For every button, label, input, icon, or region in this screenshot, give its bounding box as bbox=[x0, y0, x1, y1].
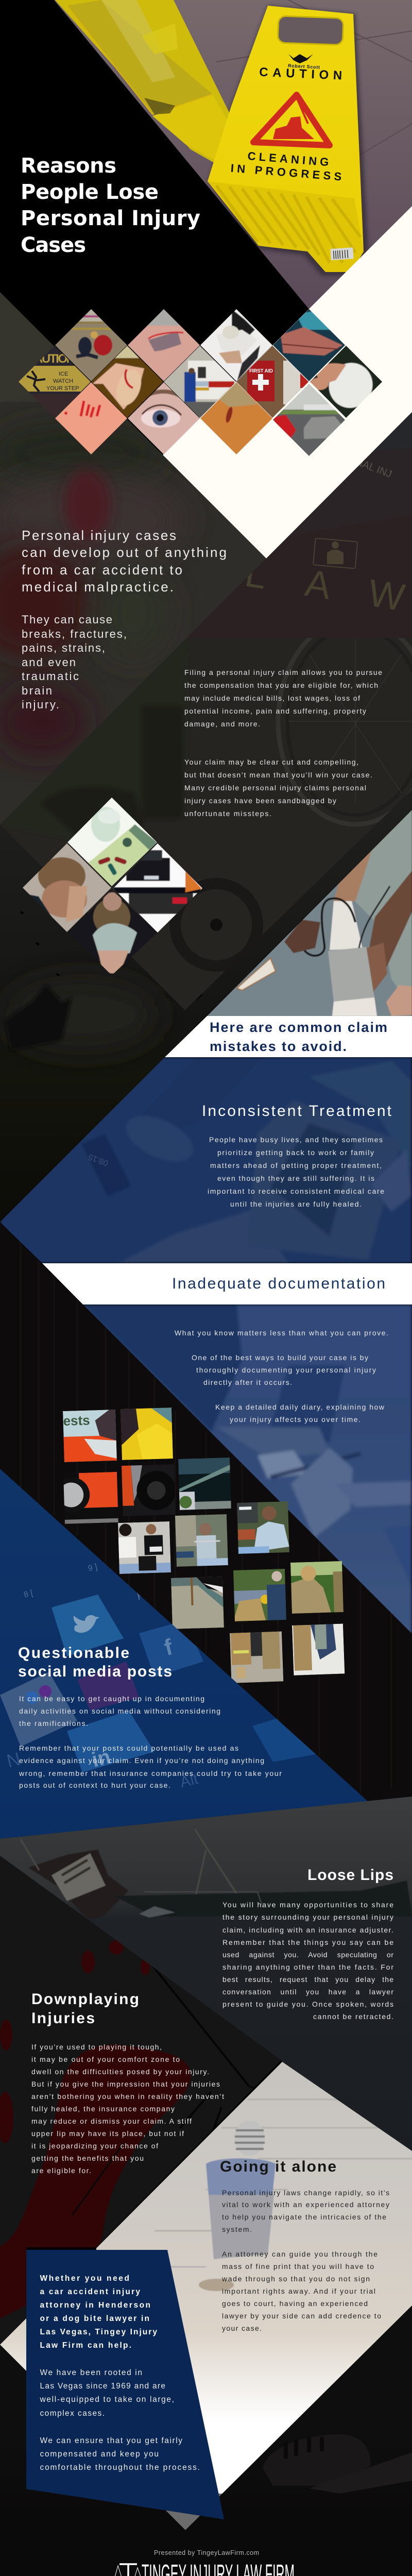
text block: filing a claim: Your claim may be clear cut and compelling, bbox=[184, 758, 358, 766]
panel: questionable social media posts: Remember that your posts could potentially be used as bbox=[19, 1744, 238, 1752]
right standing sign: IN PROGRESS bbox=[230, 162, 342, 183]
photo tile: firefighter at car bbox=[233, 1569, 286, 1621]
intro text: personal injury cases: brain bbox=[22, 684, 52, 697]
panel: going it alone with stone wall photo: mass of fine print that you will have to bbox=[222, 2262, 374, 2270]
photo tile: orange car with sign bbox=[63, 1410, 117, 1462]
panel: callout common claim mistakes: Here are common claim bbox=[210, 1020, 387, 1035]
photo tile: firefighter legs bbox=[230, 1631, 283, 1683]
diamond: gash on orange skin bbox=[198, 381, 276, 456]
callout: tingey injury law firm can help bbox=[26, 2247, 224, 2519]
panel: loose lips with shipwreck photo: conversation until you have a lawyer bbox=[222, 1988, 393, 1996]
right standing sign: CLEANING bbox=[247, 149, 329, 168]
panel: downplaying injuries: fully healed, the insurance company bbox=[31, 2105, 175, 2113]
panel: going it alone with stone wall photo: An attorney can guide you through the bbox=[222, 2250, 377, 2258]
panel: going it alone with stone wall photo: vital to work with an experienced attorney bbox=[222, 2200, 389, 2209]
panel: inadequate documentation photo: What you know matters less than what you can prove. bbox=[175, 1329, 388, 1337]
panel: going it alone with stone wall photo bbox=[0, 2061, 412, 2532]
intro text: personal injury cases: breaks, fractures, bbox=[22, 628, 127, 640]
photo tile: orange fender and wheel bbox=[54, 1472, 118, 1524]
panel: cream chevron band bbox=[163, 206, 412, 558]
diamond: cut finger bbox=[90, 343, 165, 420]
panel: questionable social media posts: P bbox=[135, 1588, 147, 1603]
panel: downplaying injuries bbox=[0, 1855, 288, 2349]
callout: tingey injury law firm can help: Law Firm can help. bbox=[40, 2341, 131, 2350]
panel: inadequate documentation photo bbox=[82, 1304, 412, 1634]
intro text: personal injury cases: They can cause bbox=[22, 613, 112, 626]
panel: inadequate documentation photo: Keep a detailed daily diary, explaining how bbox=[215, 1403, 385, 1411]
diamond: first aid sign bbox=[236, 346, 308, 418]
callout: tingey injury law firm can help: or a dog bite lawyer in bbox=[40, 2314, 149, 2323]
photo tile: orange car with sign: ests bbox=[63, 1412, 90, 1429]
diamond: distressed man bbox=[21, 842, 113, 935]
right standing sign: Robert Scott bbox=[288, 63, 320, 70]
panel: dark storm photo and band bbox=[0, 788, 412, 1226]
diamond: paramedic on sand bbox=[55, 309, 127, 381]
panel: law book photo bbox=[185, 412, 412, 639]
panel: injury intro with blurred wound photo bbox=[0, 289, 268, 829]
text block: filing a claim: Filing a personal injury claim allows you to pursue bbox=[184, 668, 382, 676]
panel: going it alone with stone wall photo: lawyer by your side can add credence to bbox=[222, 2312, 381, 2320]
intro text: personal injury cases: and even bbox=[22, 656, 76, 669]
photo tile: man in hospital gown bbox=[237, 1501, 289, 1554]
intro text: personal injury cases: Personal injury cases bbox=[22, 528, 176, 543]
callout: tingey injury law firm can help: a car accident injury bbox=[40, 2287, 140, 2296]
text block: filing a claim: damage, and more. bbox=[184, 720, 260, 728]
diamond: highway accident bbox=[273, 384, 345, 456]
right standing sign: CAUTION bbox=[259, 65, 342, 83]
diamond: ice warning sign: YOUR STEP bbox=[46, 385, 79, 392]
panel: going it alone with stone wall photo: goes to court, having an experienced bbox=[222, 2299, 368, 2308]
panel: questionable social media posts: 8 [ bbox=[23, 1589, 34, 1600]
callout: tingey injury law firm can help: Whether you need bbox=[40, 2274, 129, 2283]
text block: filing a claim bbox=[184, 668, 382, 818]
left folded sign bbox=[55, 0, 229, 163]
panel: inadequate documentation photo: thoroughly documenting your personal injury bbox=[196, 1366, 376, 1374]
text block: filing a claim: may include medical bills, lost wages, loss of bbox=[184, 694, 360, 702]
panel: loose lips with shipwreck photo: the story surrounding your personal injury bbox=[222, 1913, 393, 1921]
callout: tingey injury law firm can help: compensated and keep you bbox=[40, 2450, 159, 2459]
title: Reasons bbox=[21, 154, 116, 178]
panel: inconsistent treatment bbox=[0, 1057, 412, 1263]
panel: loose lips with shipwreck photo: You will have many opportunities to share bbox=[222, 1901, 393, 1909]
panel: inconsistent treatment: matters ahead of getting proper treatment, bbox=[210, 1161, 382, 1170]
title: Personal Injury bbox=[21, 207, 200, 230]
panel: going it alone with stone wall photo: Personal injury laws change rapidly, so it’s bbox=[222, 2189, 389, 2197]
panel: downplaying injuries: Downplaying bbox=[31, 1991, 139, 2008]
panel: going it alone with stone wall photo: Going it alone bbox=[220, 2158, 336, 2175]
heading strip: inadequate documentation bbox=[42, 1263, 412, 1304]
panel: law book photo: LAW bbox=[242, 552, 407, 619]
diamond: ice warning sign: WATCH bbox=[53, 378, 73, 384]
callout: tingey injury law firm can help: complex cases. bbox=[40, 2409, 105, 2418]
panel: downplaying injuries: it is jeopardizing your chance of bbox=[31, 2142, 158, 2150]
panel: callout common claim mistakes: mistakes to avoid. bbox=[210, 1039, 347, 1054]
diamond: woman holding cash bbox=[88, 890, 158, 974]
panel: inconsistent treatment: until the injuries are fully healed. bbox=[230, 1200, 362, 1208]
panel: downplaying injuries: Injuries bbox=[31, 2010, 95, 2027]
panel: questionable social media posts: evidence against your claim. Even if you’re not doing anything bbox=[19, 1756, 264, 1765]
panel: dark wood background with photo tiles bbox=[0, 1222, 412, 1804]
panel: questionable social media posts: posts out of context to hurt your case. bbox=[19, 1781, 170, 1789]
photo tile: woman with walker bbox=[175, 1514, 228, 1567]
photo tile: firefighter at blue car door bbox=[292, 1624, 345, 1675]
panel: going it alone with stone wall photo: your case. bbox=[222, 2324, 262, 2332]
panel: questionable social media posts: Questionable bbox=[18, 1645, 129, 1662]
panel: going it alone with stone wall photo: system. bbox=[222, 2225, 252, 2233]
diamond: bandaged hand bbox=[309, 343, 384, 420]
panel: questionable social media posts: f bbox=[162, 1634, 175, 1660]
panel: downplaying injuries: getting the benefits that you bbox=[31, 2154, 144, 2162]
diamond: ice warning sign bbox=[19, 346, 91, 417]
panel: questionable social media posts: N bbox=[5, 1748, 23, 1772]
diamond: scratched skin bbox=[52, 381, 129, 456]
diamond: stitched arm bbox=[273, 309, 345, 381]
diamond: ambulance bbox=[162, 343, 237, 420]
callout: tingey injury law firm can help: comfortable throughout the process. bbox=[40, 2463, 200, 2472]
panel: downplaying injuries: are eligible for. bbox=[31, 2166, 91, 2175]
hero photo: caution signs bbox=[52, 0, 412, 309]
diamond: ice warning sign: AUTION bbox=[34, 352, 75, 366]
callout: tingey injury law firm can help: Las Vegas since 1969 and are bbox=[40, 2382, 165, 2391]
panel: law book photo: NAL INJ bbox=[354, 456, 393, 480]
callout: tingey injury law firm can help: We can ensure that you get fairly bbox=[40, 2436, 182, 2445]
text block: filing a claim: unfortunate missteps. bbox=[184, 809, 271, 818]
panel: questionable social media posts: in bbox=[90, 1745, 113, 1772]
intro text: personal injury cases: traumatic bbox=[22, 670, 79, 683]
panel: questionable social media posts: the ramifications. bbox=[19, 1719, 88, 1727]
intro text: personal injury cases: can develop out of anything bbox=[22, 545, 227, 560]
panel: questionable social media posts: wrong, remember that insurance companies could try to take your bbox=[19, 1769, 282, 1777]
intro text: personal injury cases bbox=[22, 528, 227, 711]
photo tile: veranda bbox=[178, 1458, 231, 1510]
panel: downplaying injuries: dwell on the difficulties posed by your injury. bbox=[31, 2067, 209, 2076]
panel: loose lips with shipwreck photo: claim, including with an insurance adjuster. bbox=[222, 1926, 393, 1934]
panel: wheelchair photo bbox=[0, 618, 412, 1019]
heading strip: inadequate documentation: Inadequate documentation bbox=[172, 1275, 385, 1292]
panel: inconsistent treatment: prioritize getting back to work or family bbox=[217, 1148, 374, 1157]
panel: downplaying injuries: If you’re used to playing it tough, bbox=[31, 2043, 162, 2051]
photo tile: walker wheels on floor bbox=[171, 1577, 224, 1629]
callout: tingey injury law firm can help: We have been rooted in bbox=[40, 2368, 142, 2377]
diamond: red eye bbox=[126, 381, 201, 456]
photo: blood pressure check bbox=[206, 793, 412, 1020]
panel: loose lips with shipwreck photo: cannot be retracted. bbox=[313, 2012, 393, 2021]
photo tile: woman and man with arm cast bbox=[118, 1521, 171, 1574]
text block: filing a claim: injury cases have been sandbagged by bbox=[184, 796, 336, 805]
diamond: first aid sign: FIRST AID bbox=[249, 368, 273, 374]
diamond: wrecked car on tow truck bbox=[113, 843, 202, 933]
panel: questionable social media posts: It can be easy to get caught up in documenting bbox=[19, 1694, 204, 1703]
panel: loose lips with shipwreck photo: present to guide you. Once spoken, words bbox=[222, 2000, 393, 2008]
text block: filing a claim: Many credible personal injury claims personal bbox=[184, 784, 366, 792]
panel: loose lips with shipwreck photo: Loose Lips bbox=[307, 1867, 393, 1884]
panel: downplaying injuries: aren’t bothering you when in reality they haven’t bbox=[31, 2092, 224, 2100]
bottom background with plane wreck bbox=[0, 2306, 412, 2576]
logo: tingey injury law firm bbox=[115, 2559, 295, 2576]
footer: presented by: Presented by TingeyLawFirm.com bbox=[154, 2549, 259, 2556]
diamond: pills on dollar bill bbox=[67, 798, 157, 886]
text block: filing a claim: but that doesn’t mean that you’ll win your case. bbox=[184, 771, 372, 779]
panel: questionable social media posts: Alt bbox=[178, 1770, 200, 1791]
photo tile: county firefighter bbox=[290, 1561, 344, 1614]
panel: questionable social media posts: daily activities on social media without considering bbox=[19, 1707, 220, 1715]
panel: downplaying injuries: upper lip may have its place, but not if bbox=[31, 2129, 184, 2138]
right standing sign bbox=[208, 6, 364, 272]
injury photo collage bbox=[15, 307, 384, 459]
title bbox=[21, 154, 200, 257]
panel: questionable social media posts bbox=[0, 1468, 371, 1839]
intro text: personal injury cases: pains, strains, bbox=[22, 641, 105, 654]
panel: inadequate documentation photo: directly after it occurs. bbox=[203, 1378, 292, 1386]
intro text: personal injury cases: injury. bbox=[22, 698, 59, 711]
panel: inconsistent treatment: People have busy lives, and they sometimes bbox=[209, 1136, 383, 1144]
panel: loose lips with shipwreck photo: best results, request that you delay the bbox=[222, 1975, 393, 1984]
callout: tingey injury law firm can help: well-equipped to take on large, bbox=[39, 2395, 174, 2404]
panel: loose lips with shipwreck photo bbox=[0, 1793, 412, 2164]
photo tile: yellow car door bbox=[121, 1408, 173, 1460]
panel: callout common claim mistakes bbox=[165, 1016, 412, 1057]
panel: inadequate documentation photo: One of the best ways to build your case is by bbox=[192, 1353, 368, 1362]
panel: going it alone with stone wall photo: to help you navigate the intricacies of the bbox=[222, 2213, 386, 2221]
panel: loose lips with shipwreck photo: sharing anything other than the facts. For bbox=[222, 1963, 393, 1971]
money and injury photo collage bbox=[21, 796, 206, 977]
panel: questionable social media posts: 9 ] bbox=[87, 1563, 98, 1573]
panel: inconsistent treatment: important to receive consistent medical care bbox=[208, 1187, 384, 1195]
panel: downplaying injuries: it may be out of your comfort zone to bbox=[31, 2055, 180, 2063]
intro text: personal injury cases: medical malpractice. bbox=[22, 579, 174, 595]
callout: tingey injury law firm can help: Las Vegas, Tingey Injury bbox=[40, 2328, 157, 2336]
title: Cases bbox=[21, 233, 86, 257]
panel: downplaying injuries: may reduce or dismiss your claim. A stiff bbox=[31, 2117, 192, 2125]
panel: inconsistent treatment: 08:15 bbox=[87, 1152, 109, 1167]
text block: filing a claim: the compensation that you are eligible for, which bbox=[184, 681, 378, 689]
panel: going it alone with stone wall photo: wade through so that you do not sign bbox=[221, 2275, 370, 2283]
text block: filing a claim: potential income, pain and suffering, property bbox=[184, 707, 366, 715]
panel: loose lips with shipwreck photo: Remember that the things you say can be bbox=[222, 1938, 393, 1946]
callout: tingey injury law firm can help: attorney in Henderson bbox=[40, 2301, 150, 2310]
diamond: scraped skin bbox=[128, 309, 200, 381]
panel: downplaying injuries: But if you give the impression that your injuries bbox=[31, 2080, 220, 2088]
panel: questionable social media posts: social media posts bbox=[18, 1663, 172, 1680]
diamond: gloved hands bandaging bbox=[200, 309, 272, 381]
title: People Lose bbox=[21, 180, 159, 204]
diamond: ice warning sign: ICE bbox=[59, 371, 68, 377]
photo tile: crushed wheel bbox=[122, 1464, 177, 1516]
panel: inadequate documentation photo: your injury affects you over time. bbox=[230, 1415, 360, 1423]
intro text: personal injury cases: from a car accident to bbox=[22, 562, 182, 578]
panel: loose lips with shipwreck photo: used against you. Avoid speculating or bbox=[222, 1951, 393, 1959]
panel: inconsistent treatment: Inconsistent Treatment bbox=[202, 1103, 392, 1120]
panel: going it alone with stone wall photo: important rights away. And if your trial bbox=[222, 2287, 375, 2295]
panel: inconsistent treatment: even though they are still suffering. It is bbox=[217, 1174, 374, 1182]
